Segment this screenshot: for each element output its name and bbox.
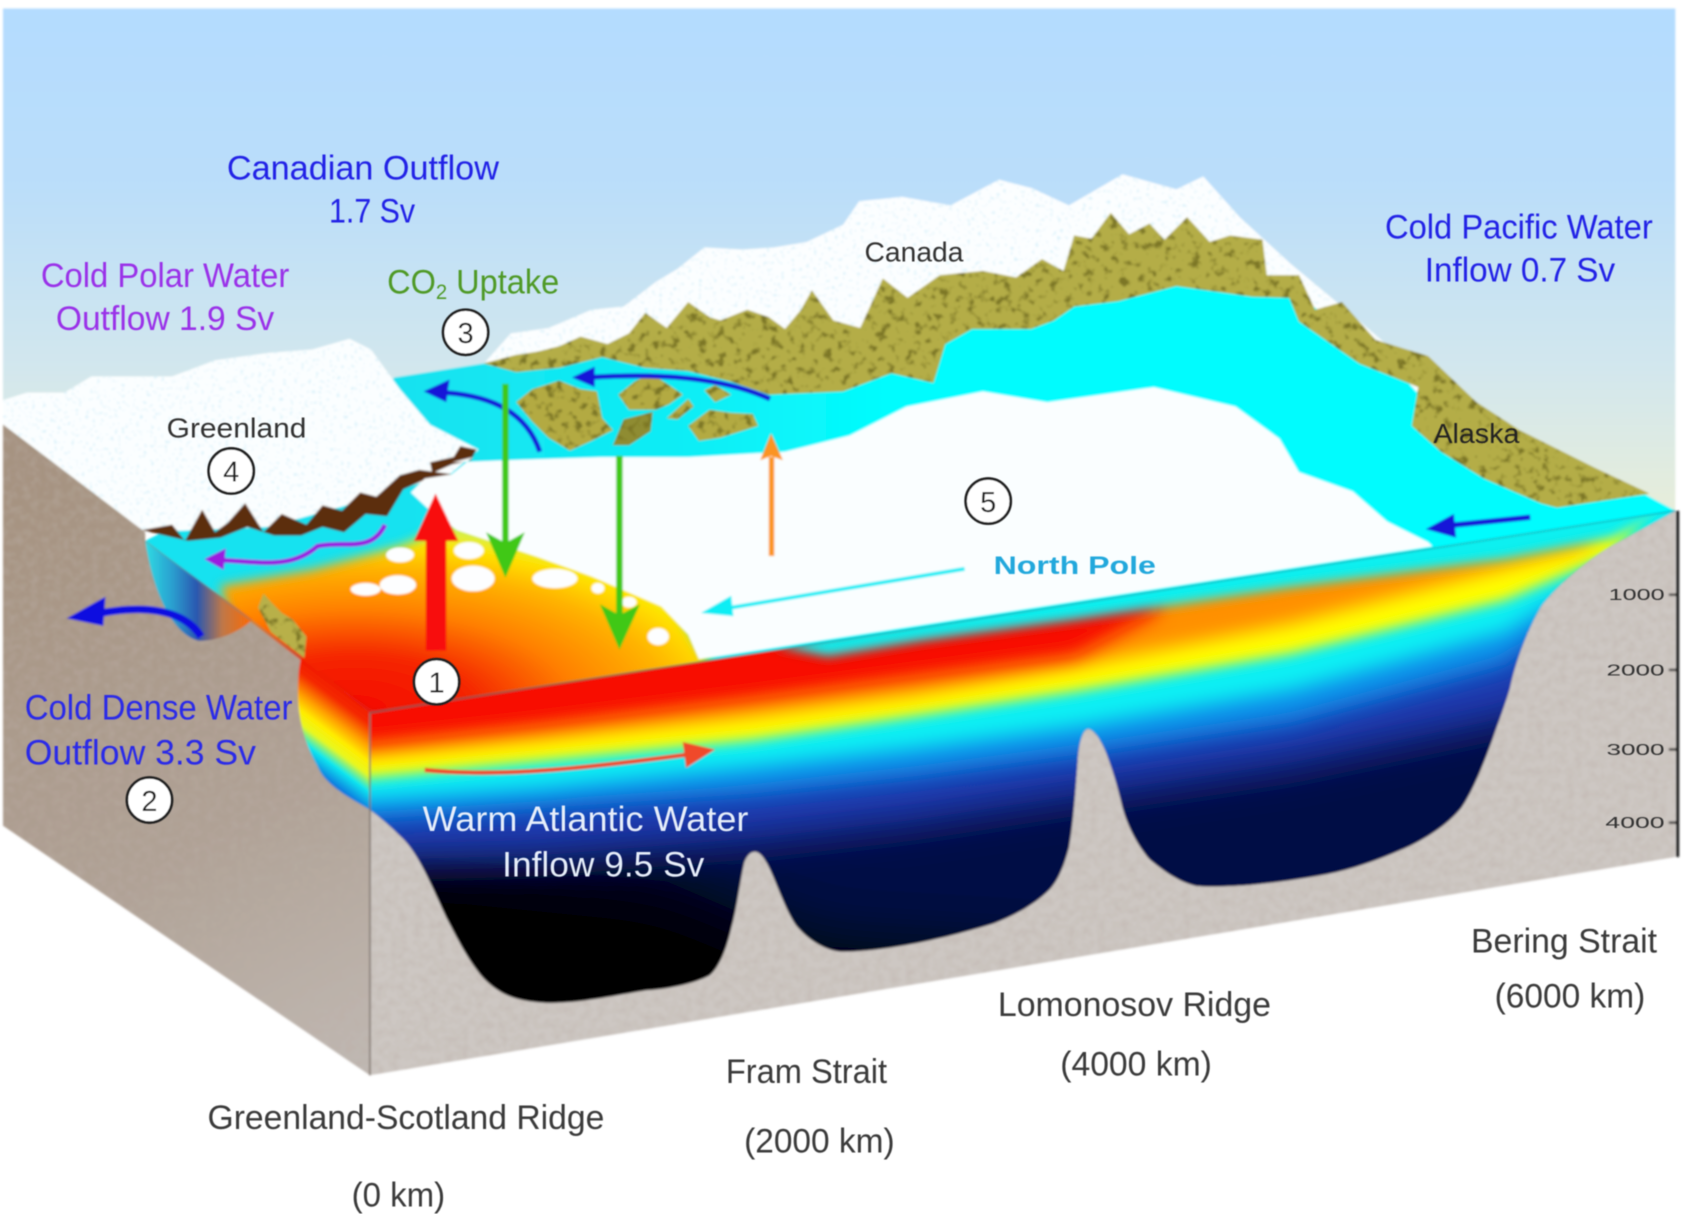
arrow: cold polar outflow: [204, 525, 385, 570]
label: Canadian Outflow: [227, 150, 499, 231]
label: Cold Pacific Water: Inflow 0.7 Sv: [1425, 252, 1616, 290]
land: Greenland-side rock face: [3, 425, 370, 1075]
label: Greenland: Greenland: [167, 413, 306, 444]
depth axis labels: 3000: [1607, 741, 1665, 759]
label: Alaska: Alaska: [1433, 418, 1520, 449]
Greenland brown coast: [142, 446, 476, 541]
label: Canadian Outflow: Canadian Outflow: [227, 150, 499, 188]
numbered marker 3: 3: [458, 318, 474, 350]
basin: Nordic Seas section: [145, 541, 253, 641]
label: Fram Strait: Fram Strait: [726, 1053, 888, 1091]
forest patch on Scotland side: [258, 594, 306, 658]
label: Bering Strait: [1471, 923, 1657, 1016]
label: Cold Polar Water: [41, 257, 289, 338]
numbered marker 1: 1: [429, 667, 445, 699]
label: Greenland-Scotland Ridge: Greenland-Scotland Ridge: [208, 1099, 604, 1137]
numbered marker 5: 5: [980, 487, 996, 519]
label: Bering Strait: Bering Strait: [1471, 923, 1657, 961]
label: Lomonosov Ridge: [998, 986, 1271, 1083]
arrow: CO2 uptake two: [600, 456, 640, 649]
arrow: Canadian outflow west: [424, 380, 540, 452]
label: Warm Atlantic Water: [423, 799, 749, 884]
label: Greenland-Scotland Ridge: (0 km): [352, 1176, 445, 1214]
small ice floes: [351, 542, 669, 645]
label: Lomonosov Ridge: Lomonosov Ridge: [998, 986, 1271, 1024]
depth axis labels: 4000: [1605, 814, 1665, 832]
label: CO2 Uptake: Uptake: [447, 264, 559, 302]
sky background: [3, 9, 1675, 519]
arrow: warm Atlantic inflow: [425, 742, 715, 773]
land: Greenland snow: [3, 339, 479, 532]
arrow: Pacific inflow: [1426, 514, 1530, 538]
arrow: dense water outflow: [67, 597, 201, 637]
numbered marker 2: 2: [141, 786, 158, 818]
arrow: CO2 uptake one: [486, 384, 525, 577]
label: Cold Pacific Water: Cold Pacific Water: [1385, 209, 1653, 247]
land: forest belt: [484, 213, 1650, 508]
depth axis labels: 2000: [1607, 661, 1665, 679]
numbered marker 5: [966, 479, 1011, 524]
numbered marker 2: [127, 777, 172, 823]
front cross-section rock face: [370, 511, 1675, 1075]
label: Fram Strait: (2000 km): [744, 1123, 895, 1161]
arrow: Canadian outflow archipelago: [572, 367, 770, 399]
front edge line: [370, 511, 1675, 713]
corner edge of block: [369, 713, 371, 1075]
ocean temperature cross-section: [368, 510, 1676, 1004]
label: Fram Strait: [726, 1053, 895, 1161]
warm surface water patch: [220, 518, 715, 720]
arrow: orange upward: [760, 433, 783, 556]
label: Warm Atlantic Water: Warm Atlantic Water: [423, 799, 749, 839]
label: CO2 Uptake: CO: [387, 264, 439, 302]
label: Canada: Canada: [865, 236, 964, 267]
numbered marker 3: [443, 310, 488, 355]
label: Greenland-Scotland Ridge: [208, 1099, 604, 1214]
numbered marker 4: [209, 448, 254, 494]
label: Cold Polar Water: Cold Polar Water: [41, 257, 289, 295]
sea ice and North Pole ice cap: [411, 387, 1432, 659]
Canadian Arctic islands: [516, 373, 758, 451]
arrow: cyan to North Pole: [701, 569, 965, 616]
label: Canadian Outflow: 1.7 Sv: [329, 193, 416, 231]
Greenland-Scotland sill section: [298, 658, 370, 810]
depth axis labels: [1605, 586, 1665, 832]
label: Cold Polar Water: Outflow 1.9 Sv: [56, 300, 275, 338]
numbered marker 1: [414, 659, 459, 704]
label: Cold Pacific Water: [1385, 209, 1653, 290]
label: Bering Strait: (6000 km): [1495, 978, 1645, 1016]
depth axis: [1669, 511, 1677, 857]
label: North Pole: North Pole: [994, 553, 1156, 580]
label: Cold Dense Water: Cold Dense Water: [25, 687, 293, 727]
arrow: red warm upwelling: [414, 494, 458, 651]
numbered marker 4: 4: [223, 457, 239, 489]
depth axis labels: 1000: [1609, 586, 1665, 604]
left surface edge: [145, 541, 301, 658]
land: Canada snow: [484, 174, 1675, 516]
label: Cold Dense Water: Outflow 3.3 Sv: [25, 733, 256, 773]
label: CO2 Uptake: 2: [436, 280, 447, 304]
label: Lomonosov Ridge: (4000 km): [1060, 1045, 1212, 1083]
water: cyan Arctic shelf seas: [145, 269, 1675, 713]
label: Warm Atlantic Water: Inflow 9.5 Sv: [502, 844, 705, 884]
label: Cold Dense Water: [25, 687, 293, 773]
